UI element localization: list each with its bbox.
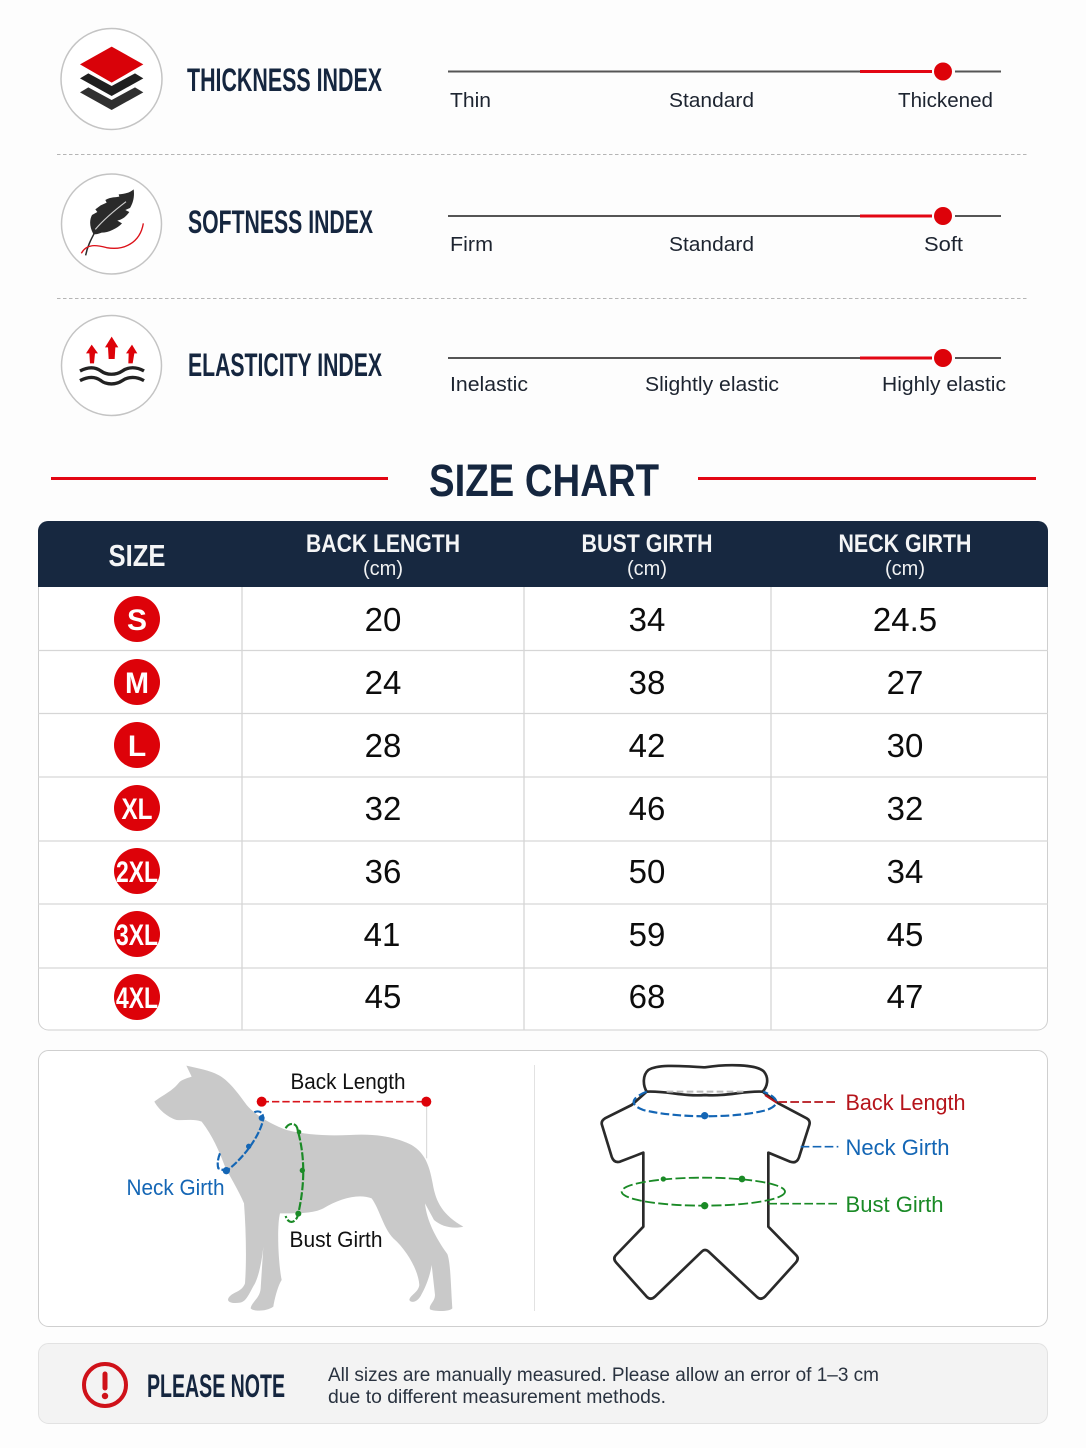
bust girth measure xyxy=(286,1124,305,1222)
leader lines xyxy=(778,1099,838,1104)
row S: S xyxy=(127,604,147,637)
slider: thickness: Standard xyxy=(669,90,754,112)
row 4XL: 68 xyxy=(629,978,665,1015)
row 2XL: 50 xyxy=(629,853,665,890)
row XL: XL xyxy=(122,793,152,826)
row M xyxy=(114,659,923,705)
slider: elasticity: Inelastic xyxy=(450,374,528,396)
heading: thickness index: THICKNESS INDEX xyxy=(187,62,382,98)
slider: softness: Standard xyxy=(669,234,754,256)
row L: 28 xyxy=(365,727,401,764)
table header: NECK GIRTH xyxy=(838,530,972,558)
row 4XL: 45 xyxy=(365,978,401,1015)
row 3XL: 41 xyxy=(364,916,400,953)
row S: 20 xyxy=(365,601,401,638)
row L: 42 xyxy=(629,727,665,764)
row M: 38 xyxy=(629,664,665,701)
row XL: 32 xyxy=(365,790,401,827)
label: bust girth: Bust Girth xyxy=(846,1192,944,1217)
row L xyxy=(114,722,923,768)
heading: elasticity index: ELASTICITY INDEX xyxy=(188,347,382,383)
row 2XL: 2XL xyxy=(116,856,158,889)
panel: thickness index xyxy=(61,28,1001,130)
table header: (cm) xyxy=(885,558,925,580)
heading: please note: PLEASE NOTE xyxy=(147,1368,285,1404)
panel: measurement diagrams xyxy=(38,1050,1048,1326)
back length measure xyxy=(257,1097,431,1158)
row 3XL: 59 xyxy=(629,916,665,953)
row S: 34 xyxy=(629,601,665,638)
table header: (cm) xyxy=(363,558,403,580)
icon: stacked layers xyxy=(61,28,162,130)
icon: arrows and waves xyxy=(62,316,162,416)
row S xyxy=(114,596,937,642)
bust ellipse xyxy=(622,1178,785,1206)
label: back length: Back Length xyxy=(290,1069,406,1094)
row 3XL: 3XL xyxy=(116,919,158,952)
slider: softness: Firm xyxy=(450,234,493,256)
neck girth measure xyxy=(218,1111,265,1174)
row 4XL: 47 xyxy=(887,978,923,1015)
table header xyxy=(38,521,1048,587)
slider: elasticity xyxy=(448,349,1006,396)
icon: feather xyxy=(62,174,162,274)
table header: SIZE xyxy=(108,538,166,573)
slider: softness xyxy=(448,207,1001,256)
label: neck girth: Neck Girth xyxy=(846,1135,950,1160)
row XL: 32 xyxy=(887,790,923,827)
row S: 24.5 xyxy=(873,601,937,638)
slider: elasticity: Highly elastic xyxy=(882,374,1006,396)
note text xyxy=(328,1365,879,1408)
garment outline xyxy=(602,1065,810,1299)
panel: please note xyxy=(38,1344,1048,1424)
row 4XL xyxy=(114,974,923,1020)
slider: thickness xyxy=(448,62,1001,112)
note text: All sizes are manually measured. Please allow an error of 1–3 cm xyxy=(328,1365,879,1386)
table header: BUST GIRTH xyxy=(582,530,712,558)
slider: elasticity: Slightly elastic xyxy=(645,374,779,396)
row M: M xyxy=(125,667,149,700)
row 3XL: 45 xyxy=(887,916,923,953)
size table xyxy=(38,521,1048,1030)
panel: elasticity index xyxy=(62,316,1006,416)
label: neck girth: Neck Girth xyxy=(126,1175,224,1200)
row 2XL: 34 xyxy=(887,853,923,890)
label: back length: Back Length xyxy=(846,1090,966,1115)
dog silhouette xyxy=(154,1066,463,1311)
row 2XL xyxy=(114,848,923,894)
row 4XL: 4XL xyxy=(116,982,158,1015)
row XL xyxy=(114,785,923,831)
slider: thickness: Thickened xyxy=(898,90,993,112)
row L: 30 xyxy=(887,727,923,764)
neck ellipse xyxy=(634,1092,776,1116)
row M: 27 xyxy=(887,664,923,701)
row 2XL: 36 xyxy=(365,853,401,890)
dog diagram xyxy=(126,1066,463,1311)
garment diagram xyxy=(602,1065,966,1299)
table header: BACK LENGTH xyxy=(306,530,460,558)
row XL: 46 xyxy=(629,790,665,827)
icon: exclamation xyxy=(84,1364,126,1406)
panel: softness index xyxy=(62,174,1001,274)
row 3XL xyxy=(114,911,923,957)
row L: L xyxy=(128,730,146,763)
table header: (cm) xyxy=(627,558,667,580)
label: bust girth: Bust Girth xyxy=(290,1227,382,1252)
row M: 24 xyxy=(365,664,401,701)
title: size chart: SIZE CHART xyxy=(429,455,659,506)
note text: due to different measurement methods. xyxy=(328,1387,666,1408)
slider: softness: Soft xyxy=(924,234,963,256)
heading: softness index: SOFTNESS INDEX xyxy=(188,204,373,240)
slider: thickness: Thin xyxy=(450,90,491,112)
